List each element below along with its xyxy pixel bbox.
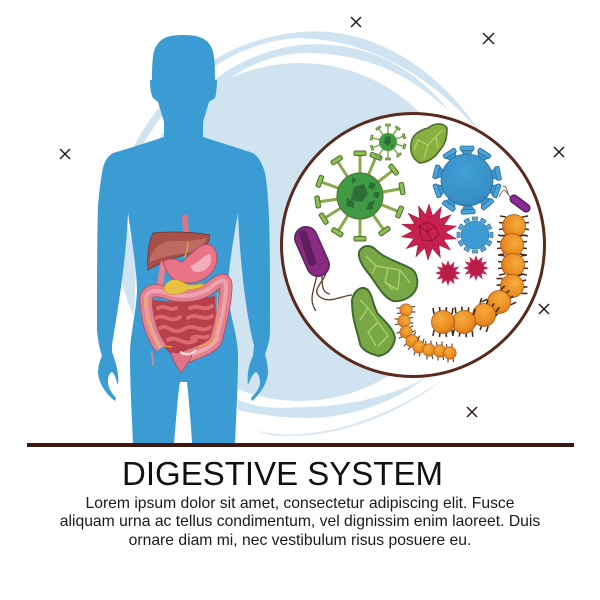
small blue virus	[457, 217, 493, 253]
rectum	[171, 352, 192, 373]
duodenum	[160, 262, 164, 290]
body text: Lorem ipsum dolor sit amet, consectetur adipiscing elit. Fusce	[86, 494, 514, 512]
large intestine	[146, 280, 226, 358]
ground line	[27, 443, 574, 447]
large purple bacterium	[303, 234, 352, 311]
small purple bacterium	[499, 186, 526, 208]
appendix	[152, 352, 153, 366]
orange chain small	[394, 304, 456, 362]
green virus	[315, 151, 405, 241]
small green virus	[370, 124, 406, 160]
person silhouette	[97, 35, 270, 443]
body text	[60, 494, 540, 548]
x marks	[60, 17, 564, 417]
green blob bottom	[352, 288, 395, 356]
body text: ornare diam mi, nec vestibulum risus posuere eu.	[129, 532, 471, 548]
red spiky bacterium small right	[463, 255, 489, 281]
green blob middle	[359, 246, 417, 301]
liver	[148, 232, 210, 270]
background disc and arcs	[118, 31, 480, 436]
orange chain large	[432, 214, 529, 338]
red spiky bacterium small left	[435, 260, 461, 286]
title: DIGESTIVE SYSTEM	[122, 455, 443, 492]
yellow mesentery lines	[146, 242, 218, 347]
digestive organs	[146, 217, 226, 373]
stomach	[163, 244, 217, 283]
blob cell lines	[360, 256, 410, 346]
microbe circle panel	[282, 114, 544, 376]
small intestine	[152, 296, 216, 356]
red spiky bacterium large	[401, 204, 457, 260]
blue virus	[432, 146, 502, 214]
pancreas	[164, 279, 204, 294]
green blob top	[411, 124, 447, 163]
esophagus	[185, 217, 188, 250]
body text: aliquam urna ac tellus condimentum, vel dignissim enim laoreet. Duis	[60, 513, 540, 530]
